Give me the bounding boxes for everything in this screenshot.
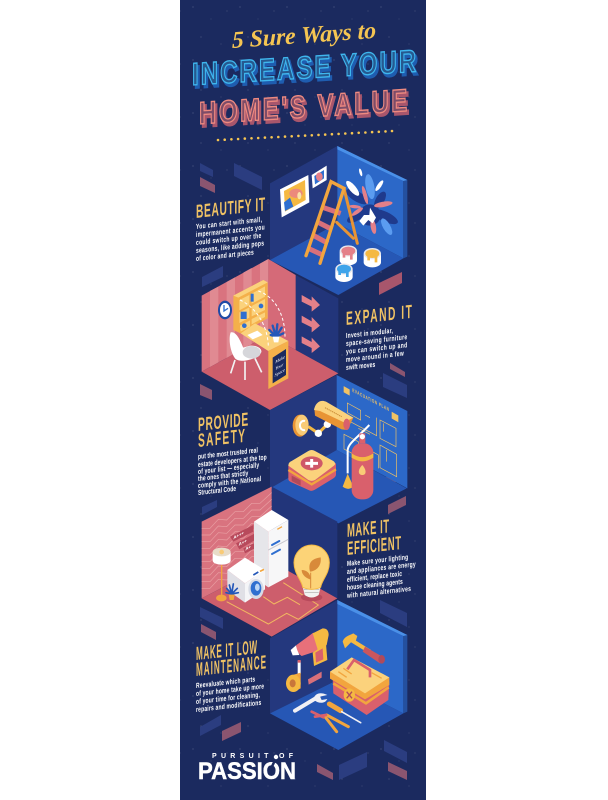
dotted divider	[217, 130, 393, 141]
plant mural	[344, 168, 400, 237]
heading: make it low maintenance: MAINTENANCE	[196, 653, 266, 681]
chair	[230, 332, 262, 380]
body: beautify it: could switch up over the	[196, 232, 262, 247]
pink tag	[308, 672, 322, 685]
folding desk: Your	[275, 363, 284, 372]
framed picture small	[312, 166, 327, 188]
body: provide safety: put the most trusted real	[198, 447, 258, 461]
body: make it low maintenance: repairs and modifications	[196, 699, 262, 714]
body: make it efficient: house cleaning agents	[347, 578, 403, 592]
folding desk: Space	[275, 368, 285, 379]
text block: beautify it	[196, 194, 266, 263]
heading: make it efficient: MAKE IT	[347, 516, 390, 542]
wall stripes	[210, 259, 268, 367]
text block: make it low maintenance	[196, 638, 266, 714]
body: make it low maintenance	[196, 676, 264, 714]
decorative parallelograms	[200, 163, 407, 780]
body: beautify it: seasons, like adding pops	[196, 240, 264, 255]
body: provide safety: of your list — especially	[198, 461, 260, 476]
dashed fold arcs	[240, 291, 285, 348]
heading: make it efficient	[347, 516, 402, 560]
body: make it low maintenance: Reevaluate which parts	[196, 676, 256, 690]
zigzag wall pattern	[202, 493, 272, 588]
hammer	[343, 633, 385, 664]
left wall	[270, 146, 337, 260]
body: expand it	[346, 327, 408, 372]
paint can yellow	[364, 248, 381, 267]
heading: provide safety: PROVIDE	[198, 409, 248, 436]
energy rating tags: A++	[239, 538, 247, 547]
wrench	[295, 693, 327, 711]
step ladder	[306, 182, 357, 263]
paint can pink	[340, 245, 357, 265]
pliers	[312, 712, 348, 732]
clock	[218, 301, 232, 319]
body: make it low maintenance: of your time for cleaning,	[196, 691, 260, 706]
floor	[270, 223, 403, 295]
background panel	[180, 0, 426, 800]
body: expand it: you can switch up and	[346, 341, 407, 356]
pink wall	[202, 487, 272, 598]
heading: make it low maintenance: MAKE IT LOW	[196, 638, 257, 665]
arrows	[302, 295, 320, 353]
first aid kit	[288, 450, 336, 491]
title: Increase Your: INCREASE YOUR	[194, 46, 418, 95]
right wall	[337, 375, 407, 488]
body: beautify it: You can start with small,	[196, 216, 262, 231]
floor	[202, 562, 337, 637]
heading: provide safety	[198, 409, 248, 452]
right wall	[337, 600, 403, 713]
bookshelf	[233, 280, 268, 333]
text block: expand it	[346, 302, 412, 372]
body: expand it: space-saving furniture	[346, 333, 408, 348]
body: expand it: move around in a few	[346, 350, 404, 364]
title: Home's Value: HOME'S VALUE	[201, 86, 409, 134]
paint can blue	[335, 263, 353, 282]
body: make it efficient	[346, 553, 416, 600]
toolbox	[330, 657, 389, 715]
floor wiring	[227, 583, 318, 624]
body: expand it: swift moves	[346, 361, 376, 372]
body: expand it: Invest in modular,	[346, 327, 393, 340]
screwdriver	[329, 704, 361, 723]
heading: provide safety: SAFETY	[198, 426, 245, 452]
power drill	[291, 628, 329, 666]
panel: make it efficient room	[202, 487, 337, 637]
body: provide safety: comply with the National	[198, 475, 261, 490]
security camera	[293, 401, 353, 437]
body: provide safety: Structural Code	[198, 485, 236, 497]
body: make it efficient: Make sure your lighting	[347, 553, 408, 568]
floor	[270, 680, 403, 750]
fire extinguisher	[343, 425, 373, 499]
body: make it efficient: efficient, replace toxic	[347, 570, 402, 584]
heading: make it low maintenance	[196, 638, 266, 681]
body: provide safety: estate developers at the top	[198, 454, 267, 469]
panel: beautify it room	[270, 146, 407, 295]
panel: expand it room	[202, 259, 338, 410]
body: beautify it	[196, 216, 265, 263]
heading: make it efficient: EFFICIENT	[347, 533, 402, 560]
tape measure	[286, 660, 301, 692]
body: make it efficient: with natural alternatives	[346, 585, 411, 600]
evacuation plan	[344, 387, 398, 477]
right wall	[337, 146, 403, 258]
navy side wall	[296, 275, 338, 373]
pink floor	[202, 335, 338, 410]
floor lamp	[213, 548, 231, 601]
pink back wall	[268, 259, 296, 350]
heading: expand it: EXPAND IT	[346, 302, 412, 330]
plant	[226, 584, 238, 600]
potted plant	[269, 324, 283, 342]
body: beautify it: of color and art pieces	[196, 249, 254, 263]
body: beautify it: impermanent accents you	[196, 224, 265, 239]
floor	[270, 450, 407, 523]
folding desk	[241, 323, 288, 389]
title: 5 Sure Ways to: 5 Sure Ways to	[232, 18, 376, 54]
panel: provide safety room	[270, 375, 407, 523]
heading: beautify it: BEAUTIFY IT	[196, 194, 266, 223]
navy side wall	[272, 487, 337, 598]
panel: make it low maintenance room	[270, 600, 407, 750]
logo: Pursuit of Passion: PURSUIT OF	[212, 753, 294, 760]
title: Increase Your: INCREASE YOUR	[192, 43, 416, 92]
title: Home's Value: HOME'S VALUE	[199, 83, 407, 131]
left wall	[270, 600, 337, 713]
body: provide safety: the ones that strictly	[198, 470, 249, 483]
evacuation plan: EVACUATION PLAN	[352, 387, 389, 412]
framed picture large	[280, 175, 309, 217]
fridge	[254, 510, 288, 587]
energy rating tags: A+	[245, 544, 251, 552]
light bulb	[294, 545, 329, 601]
left wall	[270, 375, 337, 488]
folding desk: Make	[274, 355, 285, 366]
washing machine	[227, 558, 265, 603]
energy rating tags	[230, 525, 255, 553]
logo: Pursuit of Passion: PASSION	[198, 758, 296, 785]
body: provide safety	[198, 447, 267, 497]
text block: provide safety	[198, 409, 267, 497]
body: make it efficient: and appliances are energy	[347, 561, 416, 576]
body: make it low maintenance: of your home take up more	[196, 683, 264, 698]
text block: make it efficient	[346, 516, 416, 600]
energy rating tags: A+++	[233, 530, 244, 540]
pink left wall	[202, 259, 268, 372]
